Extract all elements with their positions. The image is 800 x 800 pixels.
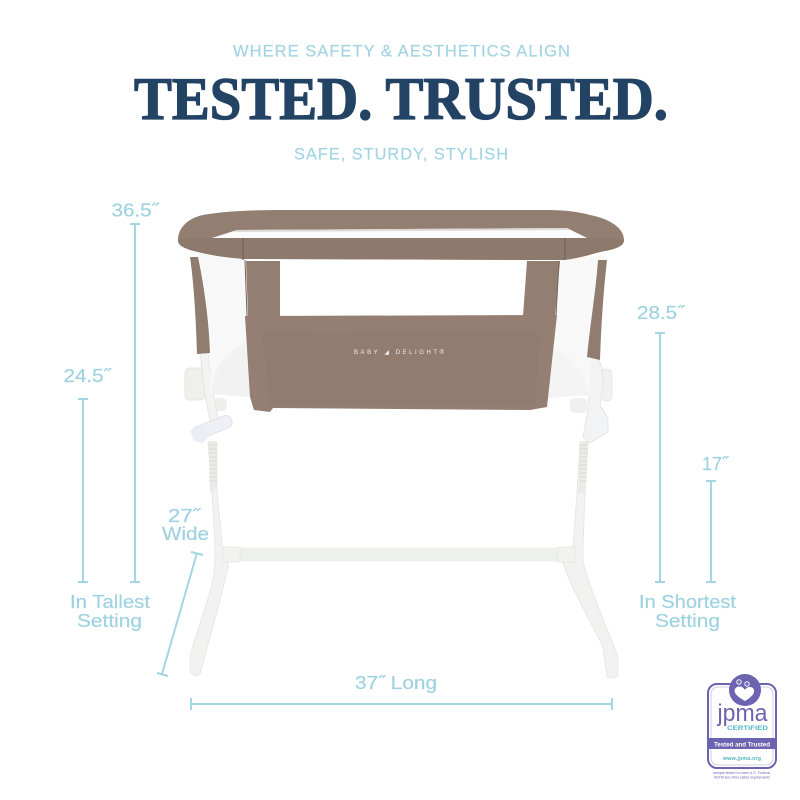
dimension: 36.5 inch height: 36.5˝	[112, 200, 160, 220]
bassinet product illustration	[178, 210, 624, 678]
dimension: 17 inch height: 17˝	[702, 454, 729, 474]
eyebrow heading: WHERE SAFETY & AESTHETICS ALIGN	[233, 42, 571, 60]
side mechanisms and locks	[185, 353, 612, 443]
dimension: 17 inch height	[702, 454, 729, 582]
brand mark: BABY ◢ DELIGHT®	[354, 349, 445, 356]
JPMA certified badge: ASTM and other safety requirements	[714, 776, 770, 780]
dimension: 37 inch long	[191, 673, 612, 710]
dimension: 36.5 inch height	[112, 200, 160, 582]
front panel with window	[245, 260, 560, 412]
title: TESTED. TRUSTED.	[134, 66, 668, 132]
top rail	[178, 210, 624, 260]
mesh side panels	[190, 253, 607, 398]
JPMA certified badge: CERTIFIED	[727, 725, 768, 732]
label: setting: Setting	[77, 611, 142, 631]
label: in shortest setting: In Shortest	[639, 592, 736, 612]
dimension: 28.5 inch height	[637, 303, 685, 582]
bassinet stand	[190, 441, 618, 678]
JPMA certified badge: jpma	[717, 700, 768, 727]
dimension: 28.5 inch height: 28.5˝	[637, 303, 685, 323]
subheading: SAFE, STURDY, STYLISH	[294, 146, 509, 164]
JPMA certified badge: sample tested to meet U.S. Federal,	[713, 771, 771, 775]
label: in tallest setting: In Tallest	[70, 592, 150, 612]
dimension: 24.5 inch height	[64, 366, 112, 582]
JPMA certified badge: www.jpma.org	[722, 756, 761, 762]
dimension: 24.5 inch height: 24.5˝	[64, 366, 112, 386]
label: setting right: Setting	[655, 611, 720, 631]
dimension: 37 inch long: 37˝ Long	[355, 673, 437, 693]
JPMA certified badge	[708, 674, 776, 780]
dimension: 27 inch wide: 27˝	[168, 506, 201, 526]
dimension: 27 inch wide: Wide	[162, 524, 209, 544]
JPMA certified badge: Tested and Trusted	[714, 742, 770, 748]
dimension: 27 inch wide	[157, 506, 209, 676]
